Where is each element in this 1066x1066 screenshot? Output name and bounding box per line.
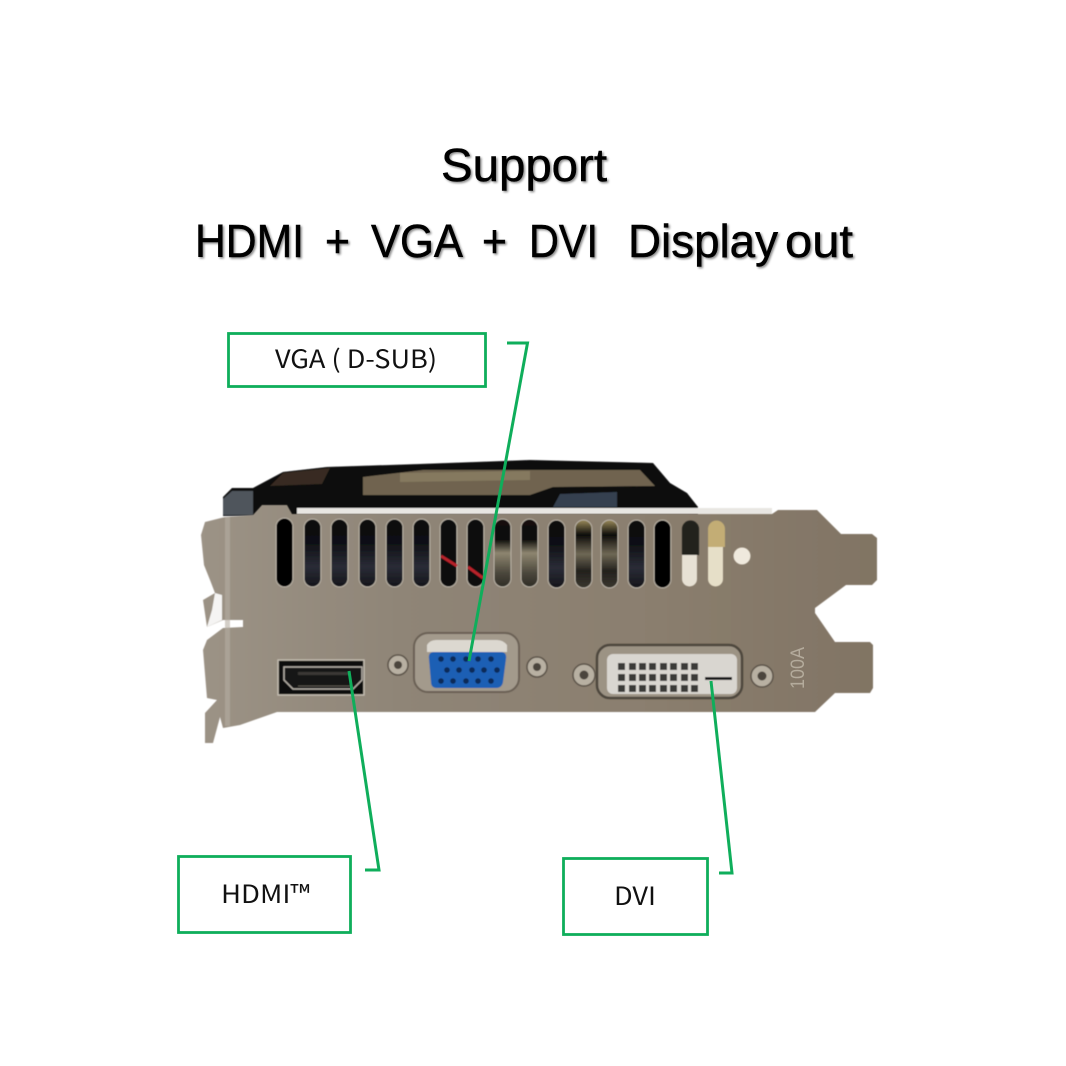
graphics card photo: [201, 460, 877, 743]
title: HDMI + VGA + DVI Display out: Display: [628, 215, 778, 267]
HDMI port: [278, 660, 364, 695]
callout: DVI: DVI: [614, 877, 656, 913]
title: HDMI + VGA + DVI Display out: [195, 215, 853, 267]
VGA port: [388, 633, 547, 692]
title: Support: Support: [441, 139, 607, 191]
DVI port: [573, 645, 773, 698]
callout: VGA (D-SUB): VGA ( D-SUB): [275, 340, 437, 376]
title: HDMI + VGA + DVI Display out: out: [785, 215, 853, 267]
callout: VGA (D-SUB): [228, 334, 486, 386]
screw: [388, 655, 408, 675]
screw: [573, 664, 595, 686]
title: HDMI + VGA + DVI Display out: DVI: [529, 215, 598, 267]
callout: DVI: [564, 858, 708, 934]
title: HDMI + VGA + DVI Display out: +: [482, 215, 507, 267]
title: HDMI + VGA + DVI Display out: VGA: [371, 215, 463, 267]
arrow: VGA leader line: [469, 343, 528, 661]
arrow: DVI leader line: [711, 681, 732, 873]
vent slots: [276, 518, 750, 588]
card body behind bracket: [223, 460, 772, 516]
metal bracket: [201, 505, 877, 743]
title: HDMI + VGA + DVI Display out: HDMI: [195, 215, 304, 267]
arrow: HDMI leader line: [349, 671, 379, 870]
title: HDMI + VGA + DVI Display out: +: [325, 215, 350, 267]
bracket stamp: 100A: 100A: [788, 647, 809, 689]
mounting hole: [734, 548, 750, 564]
callout: HDMI: HDMI™: [221, 875, 310, 911]
callout: HDMI: [178, 856, 350, 932]
